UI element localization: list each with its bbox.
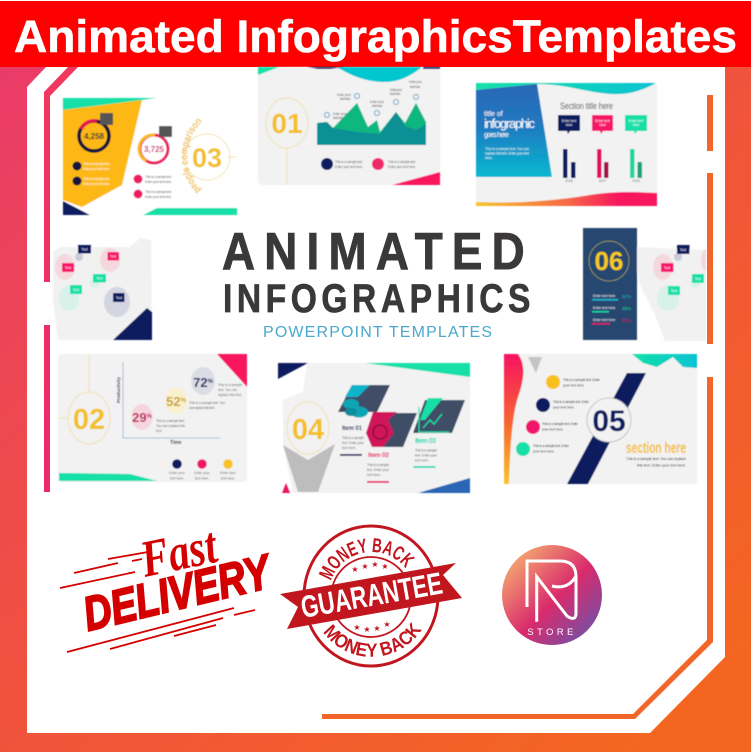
chart labels: text here. [390,92,401,96]
item 03: text here. [415,458,429,462]
item 01: Item 01 [342,426,363,432]
list on white: This is a sample text. [145,190,172,194]
legend: Enter your text here. [335,165,363,169]
fast script: Fast [135,517,223,589]
number 06: 06 [595,246,623,276]
stars: ★ [351,565,359,574]
item 03: This is a sample [415,448,437,452]
bubble 52%: 52 [166,394,181,409]
bar chart: 2018 [565,179,573,183]
slide 06 with map [583,228,706,341]
list rows: your text here. [533,450,555,454]
pink corner [217,354,247,387]
callout boxes: here [566,123,573,127]
list rows: This is a sample text. Enter [533,444,570,448]
slide 04: items [278,363,470,493]
panel heading: here. [485,156,493,160]
right and bottom frame strip [322,95,713,719]
pink triangle [282,483,290,493]
stars: ★ [381,562,389,571]
bottom legend: text here. [170,476,184,480]
bubble notes: This is a sample text. [156,419,185,423]
logo label: STORE [527,627,577,638]
item 01: text here. [342,446,356,450]
grey chevron [283,444,335,492]
donut 4,258: 4,258 [84,132,105,141]
top right wave [632,354,697,368]
bubble notes [156,383,242,433]
chart labels: text here. [333,116,344,120]
chart pins [324,94,418,118]
list on yellow: Enter your text here. [83,167,110,171]
top arc text: MONEY BACK [318,538,416,580]
section text: This is a sample text. You can replace [626,456,687,461]
list on white [134,174,172,199]
axes: Productivity [116,376,121,403]
chart labels: text here. [340,97,351,101]
bar chart: 2016 [632,179,640,183]
chart labels: Enter your [409,80,423,84]
green band [59,473,157,481]
top waves [258,67,279,75]
section text: this text. Enter your text here. [637,462,686,468]
number 05: 05 [592,405,626,438]
ribbon [280,563,462,629]
map tags [62,245,124,302]
bubble notes: This is a sample text. You [189,401,225,405]
blue panel [476,84,552,177]
top wave [476,83,656,94]
stars: ★ [373,624,381,633]
map tags: Text [65,266,71,270]
stars [351,560,391,634]
progress rows [592,294,631,324]
legend: This is a sample text. [388,160,416,164]
map tags: Text [96,276,103,280]
panel heading: infographic [484,116,536,131]
bottom legend: Enter your [194,471,211,475]
list rows: your text here. [542,428,564,432]
donut 3,725 [139,135,168,163]
blue corner [418,478,470,493]
chart labels: text here. [372,104,383,108]
callout boxes: here [633,123,640,127]
number 03 [184,134,237,180]
item 02: text. Enter your [367,468,390,472]
callout boxes: Enter text [562,119,576,123]
slide 03: people comparison [62,97,238,216]
bubble 52% [165,388,187,414]
chart labels: text here. [410,85,421,89]
number 01 [266,98,308,185]
chart labels: Enter your [370,100,385,104]
bubble notes: text. You can [218,388,237,392]
slide 02: bubble chart [58,354,247,482]
stars: ★ [361,562,369,571]
bottom legend: text here. [221,476,235,480]
delivery word: DELIVERY [78,545,278,642]
navy diagonal [567,373,646,484]
subheading: POWERPOINT TEMPLATES [263,324,492,341]
item 02: Item 02 [368,452,389,459]
stars: ★ [353,623,361,632]
map tags [661,245,704,295]
item 01: This is a sample [342,436,364,440]
slide: section title with bars [476,83,657,206]
map bubbles [55,248,130,317]
stars: ★ [371,560,379,569]
axes [116,362,220,446]
item 02: This is a sample [367,463,389,467]
bubble notes: text. [156,429,162,433]
list on yellow: This is a sample text. [83,162,110,166]
yellow panel [63,100,142,207]
bubble 72%: % [208,379,214,385]
bubble 52%: % [181,398,187,404]
callout boxes: here [599,123,606,127]
green top [365,363,470,377]
list rows: your text here. [553,406,575,410]
number 02 [58,354,110,444]
guarantee word: GUARANTEE [298,566,445,625]
bottom legend: Enter your [169,471,186,475]
item 01: text. Enter your [342,441,365,445]
panel heading: replace this text. Enter your text [485,152,529,156]
list rows [516,375,601,456]
callout boxes: Enter text [595,119,610,123]
stamp rings [304,526,438,666]
item 03 [413,398,465,468]
number 05 [587,398,631,442]
speed lines [60,552,255,652]
bubble notes: can replace this text. [189,406,215,410]
chart labels [333,80,423,120]
list rows: your text here. [563,384,585,388]
list on yellow: Enter your text here. [83,182,110,186]
curved label: people comparison [181,118,203,194]
list rows: This is a sample text. Enter [563,378,601,382]
heading line 1: ANIMATED [222,223,525,281]
money back guarantee stamp [280,524,462,668]
navy corner [278,363,308,379]
map tags: Text [664,266,670,270]
list rows: This is a sample text. Enter [553,400,590,404]
item 03: text. Enter your [415,454,438,458]
item 01 [338,385,390,456]
progress rows: 82% [622,294,631,299]
list on yellow: This is a sample text. [83,177,110,181]
stars: ★ [363,625,371,634]
grey icon box [159,126,172,137]
bottom arc text: MONEY BACK [324,622,422,657]
section title: Section title here [560,101,613,112]
slide 05: section here [504,354,697,484]
navy panel [583,228,637,340]
bar chart: 2017 [599,179,606,183]
grey icon box [100,113,113,125]
top green band [63,98,157,110]
number 01: 01 [271,108,303,139]
legend [321,158,416,170]
area chart [317,103,426,145]
bubble notes: replace this text. [218,393,242,397]
legend: Enter your text here. [388,165,416,169]
map tags: Text [680,248,686,252]
panel heading: title of [484,111,503,118]
banner title: Animated InfographicsTemplates [14,11,737,62]
navy top edges [307,67,440,69]
bubble notes: You can replace this [156,424,185,428]
bubble 29%: 29 [132,410,147,425]
store logo [502,545,602,645]
pink corner [392,172,440,185]
panel heading: This is a sample text. You can [485,147,529,151]
item 02 [366,412,417,483]
progress rows: Enter text here [593,318,615,322]
slide 01: area chart [258,67,440,185]
bubble 72% [191,367,215,395]
fast delivery badge [60,517,278,652]
list on white: Enter your text here. [145,195,172,199]
progress rows: Enter text here [593,294,615,298]
chart labels: Enter your [390,88,403,92]
teal wave [337,67,422,82]
bottom green band [143,208,237,215]
item 03: Item 03 [415,438,436,445]
stars: ★ [383,620,391,629]
legend: This is a sample text. [335,160,363,164]
number 04 [287,402,329,454]
list on yellow [72,162,110,186]
bottom wave [476,192,657,206]
axes: Time [170,440,182,446]
left wave [504,354,523,484]
central heading [222,223,530,341]
panel heading [484,111,536,160]
list rows: This is a sample text. Enter [542,422,579,426]
africa map [637,247,706,341]
map tags: Text [671,289,677,293]
map tags: Text [81,248,88,252]
number 02: 02 [73,404,105,436]
heading line 2: INFOGRAPHICS [223,276,530,321]
bubble 29% [132,404,153,430]
list on white: Enter your text here. [145,180,172,184]
bubble notes: This is a sample [218,383,242,387]
panel heading: goes here [484,132,509,139]
bottom legend: Enter your [220,471,237,475]
list on white: This is a sample text. [145,175,172,179]
section text [626,456,687,468]
chart labels: Enter your [333,112,348,116]
chart labels: Enter your [337,93,352,97]
section heading: section here [626,440,686,457]
map tags: Text [110,254,116,258]
map tags: Text [116,296,122,300]
bubble 29%: % [147,414,153,420]
map tags: Text [695,277,701,281]
callout boxes [558,115,647,134]
progress rows: 56% [622,318,631,323]
bubble 72%: 72 [193,375,208,390]
left frame strip [44,67,78,492]
map slide left [53,238,152,340]
bottom legend [169,459,237,480]
navy corner [63,201,90,215]
map bubbles [653,249,706,311]
number 03: 03 [192,143,222,173]
bottom legend: text here. [195,476,209,480]
number 04: 04 [292,414,324,446]
title banner [0,1,751,67]
donut 3,725: 3,725 [144,145,165,154]
bar chart [563,149,642,183]
logo monogram [527,561,576,622]
item 02: text here. [367,473,381,477]
grey triangle [528,357,542,373]
callout boxes: Enter text [629,119,643,123]
map tags: Text [73,288,79,292]
donut 4,258 [79,121,109,151]
progress rows: Enter text here [593,306,615,310]
navy corner [113,308,152,340]
progress rows: 45% [622,306,631,311]
